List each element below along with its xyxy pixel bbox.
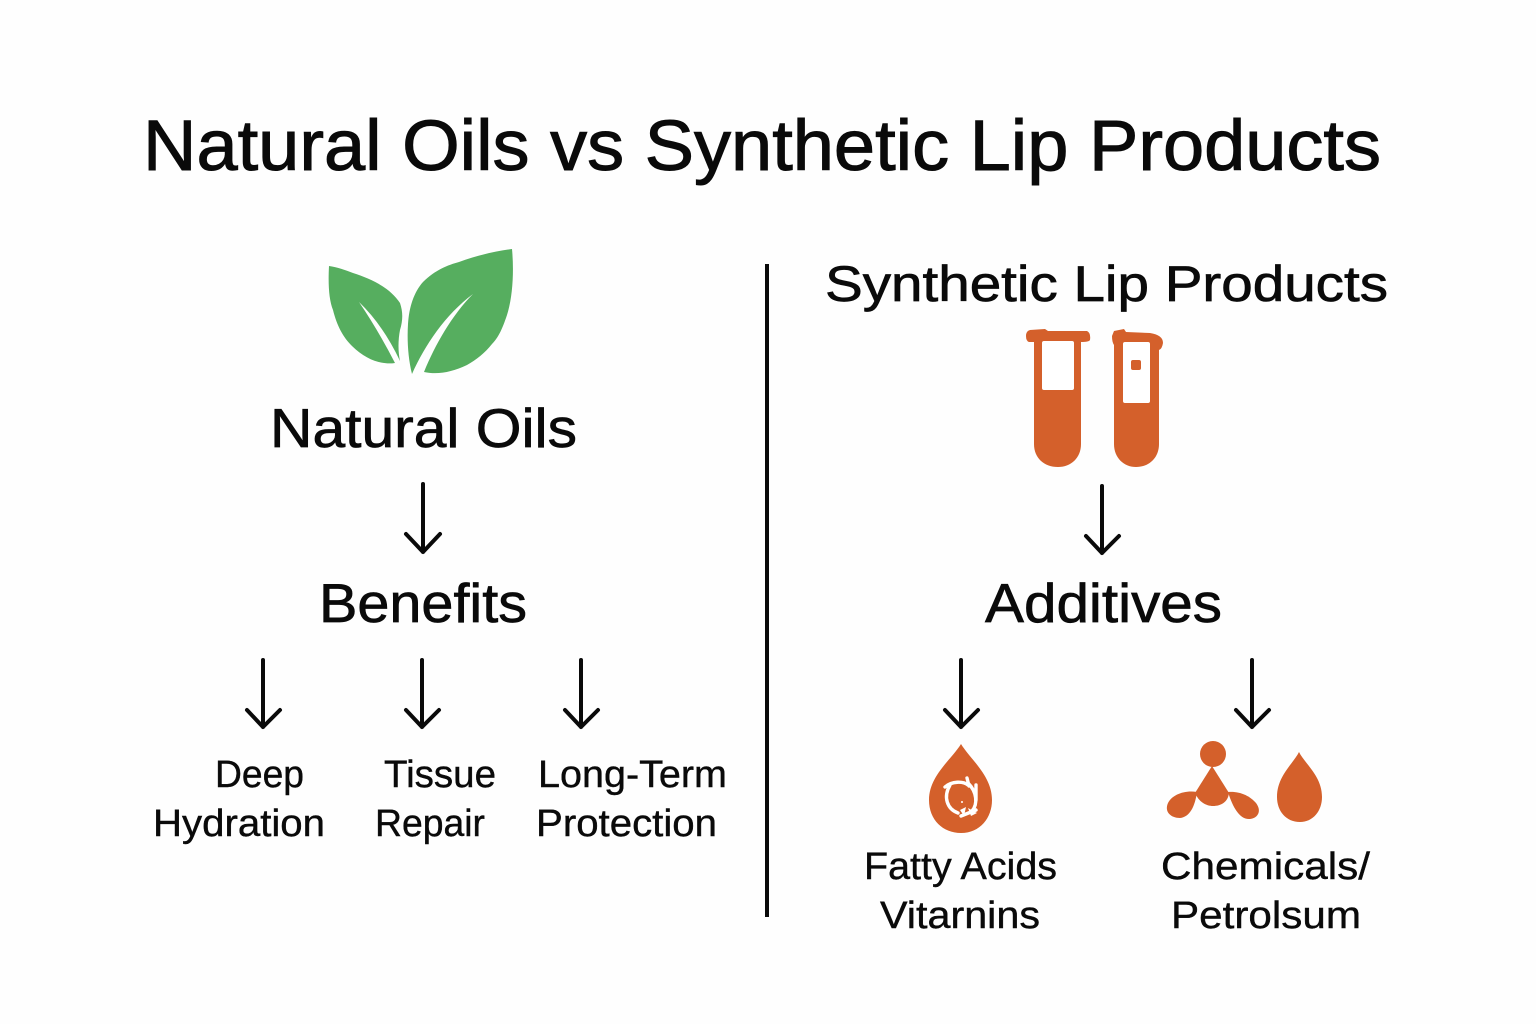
text: tissue repair: Tissue: [384, 754, 496, 796]
text: chemicals petrolatum: Petrolsum: [1171, 895, 1361, 937]
arrow: natural oils to benefits: [406, 484, 440, 552]
text: tissue repair: [375, 754, 496, 845]
arrow: to tissue repair: [406, 660, 439, 727]
heading: additives: Additives: [985, 572, 1222, 634]
text: deep hydration: [153, 754, 325, 845]
heading: synthetic lip products: Synthetic Lip Products: [825, 256, 1388, 312]
divider: [765, 264, 769, 917]
text: long-term protection: [536, 754, 727, 845]
title: Natural Oils vs Synthetic Lip Products: [143, 107, 1381, 186]
text: tissue repair: Repair: [375, 803, 485, 845]
text: fatty acids vitamins: Fatty Acids: [864, 846, 1057, 888]
icon: test tubes: [1026, 329, 1163, 467]
arrow: to deep hydration: [247, 660, 280, 727]
text: long-term protection: Protection: [536, 803, 717, 845]
panel: synthetic lip products: [825, 256, 1388, 937]
text: fatty acids vitamins: [864, 846, 1057, 937]
text: long-term protection: Long-Term: [538, 754, 727, 796]
icon: petrolatum drop: [1277, 752, 1322, 822]
text: deep hydration: Deep: [215, 754, 304, 796]
arrow: to long-term protection: [565, 660, 598, 727]
panel: natural oils: [153, 249, 727, 845]
arrow: synthetic to additives: [1086, 486, 1119, 553]
text: fatty acids vitamins: Vitarnins: [880, 895, 1040, 937]
text: deep hydration: Hydration: [153, 803, 325, 845]
icon: molecule: [1167, 741, 1259, 819]
arrow: to fatty acids: [945, 660, 978, 727]
heading: natural oils: Natural Oils: [270, 397, 577, 459]
icon: green leaves: [329, 249, 513, 374]
heading: benefits: Benefits: [319, 572, 527, 634]
text: chemicals petrolatum: Chemicals/: [1161, 846, 1370, 888]
text: chemicals petrolatum: [1161, 846, 1370, 937]
icon: fatty acid drop: [929, 744, 992, 833]
arrow: to chemicals: [1236, 660, 1269, 727]
